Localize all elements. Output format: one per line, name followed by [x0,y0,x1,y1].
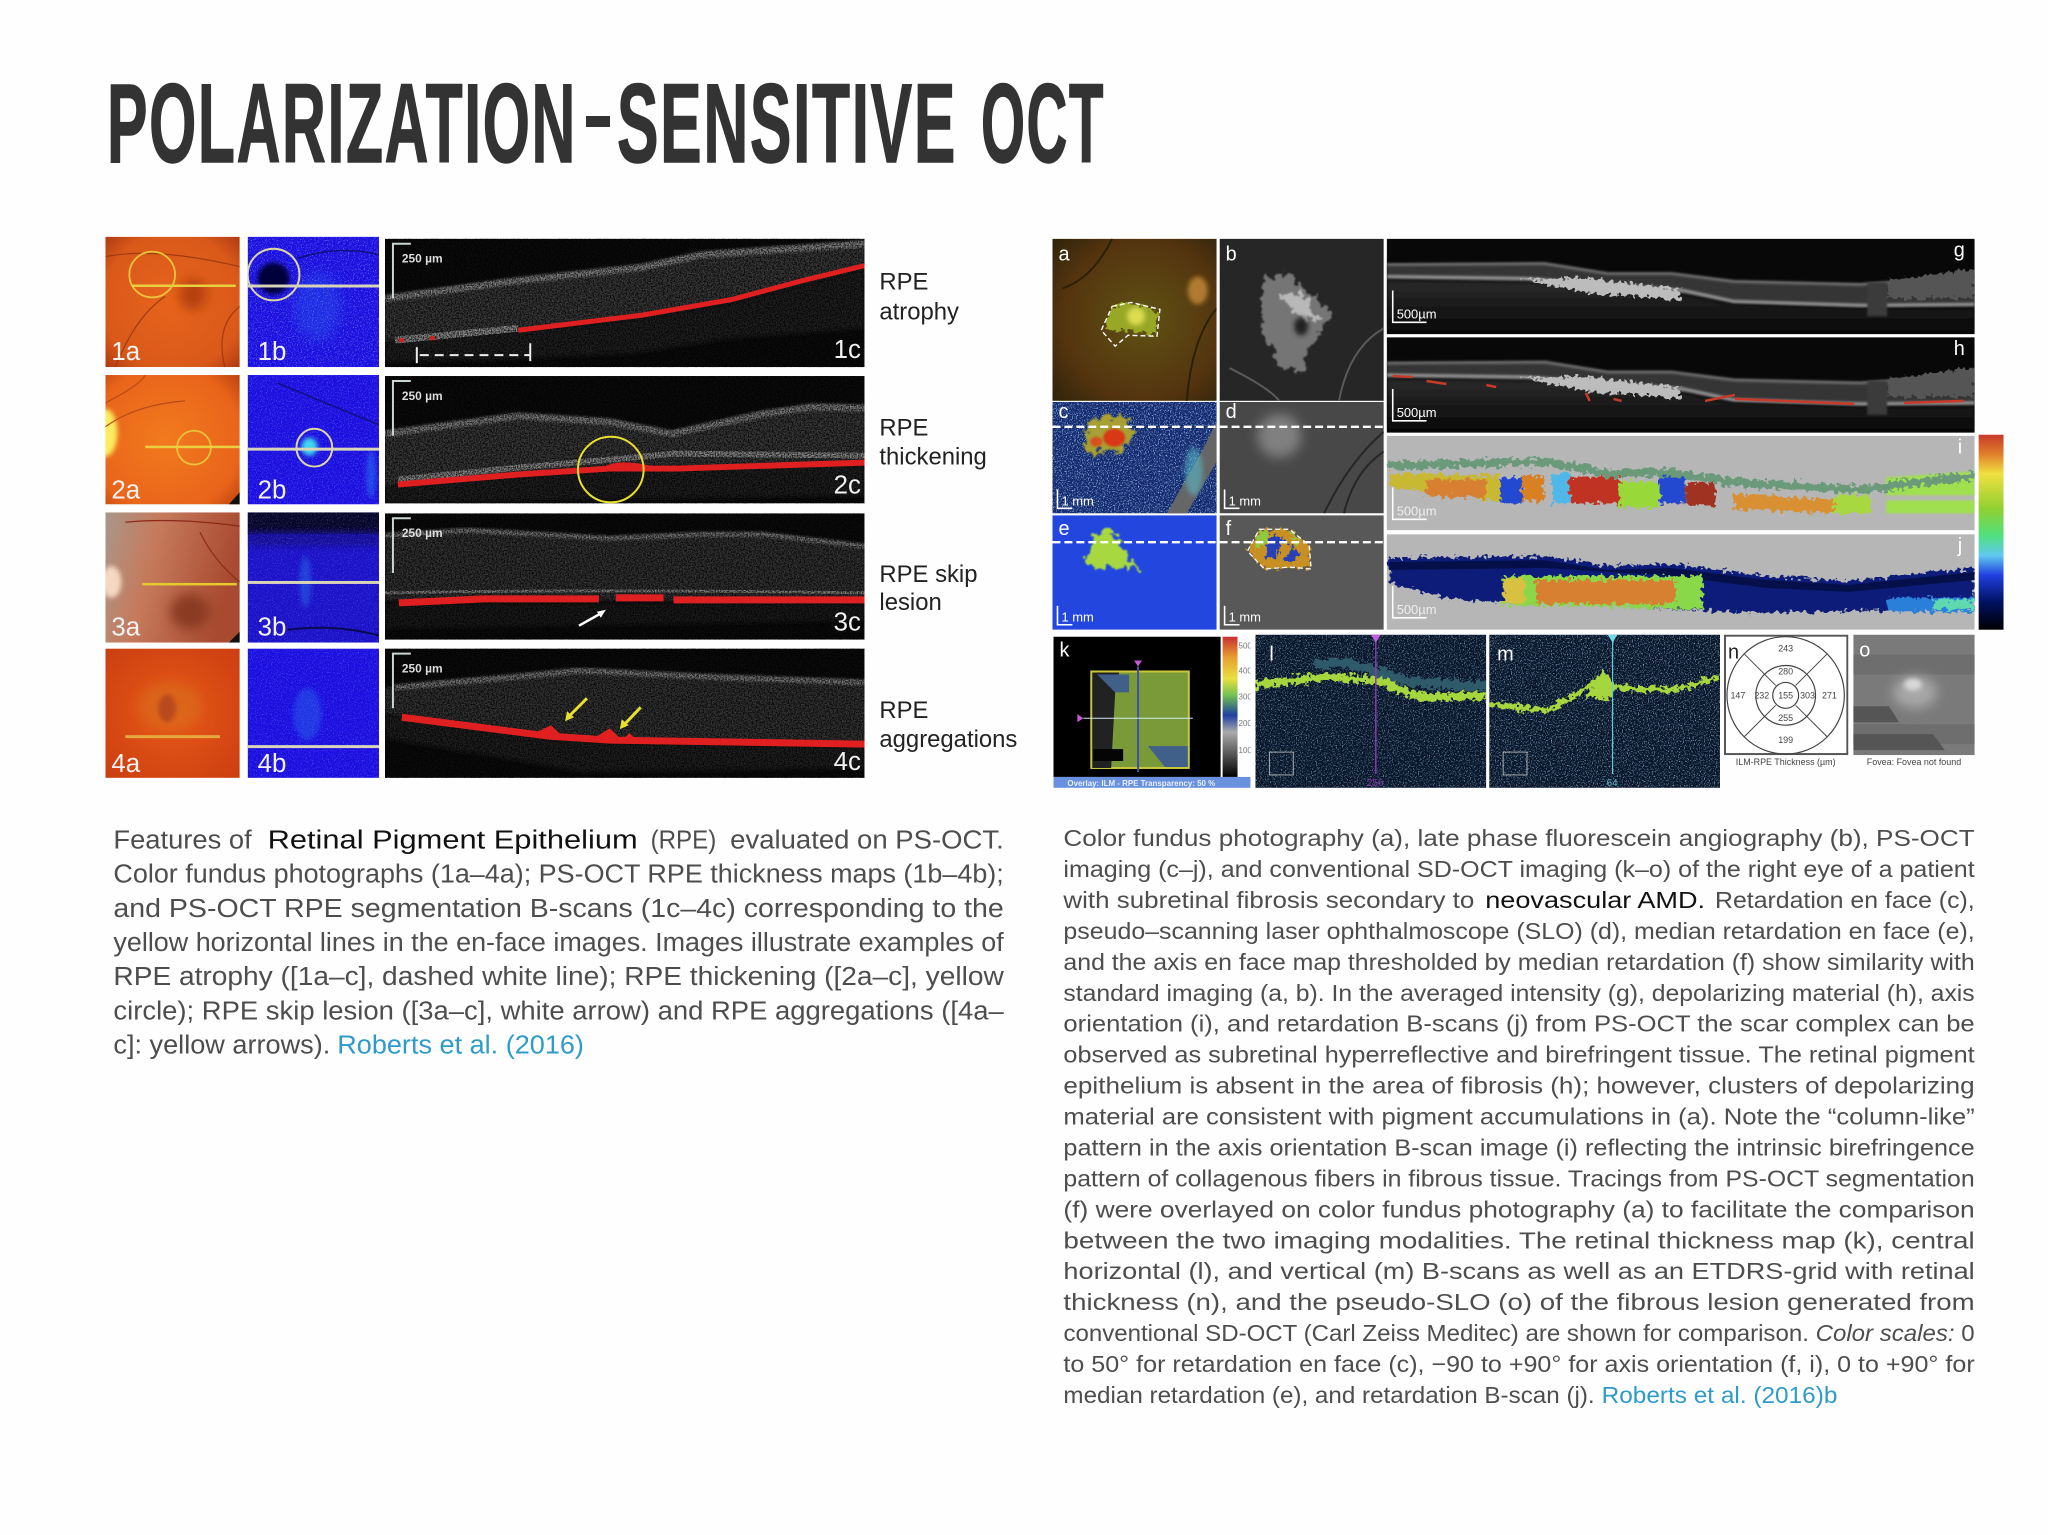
panel c: retardation en face [1052,401,1217,513]
panel j: retardation B-scan: 500µm [1397,602,1436,617]
panel n: ETDRS grid: ILM-RPE Thickness (µm) [1736,757,1836,767]
title: POLARIZATION [107,61,577,186]
panel e: median retardation: e [1058,518,1070,540]
panel k: retinal thickness map: 500 [1239,642,1252,651]
panel n: ETDRS grid: 243 [1778,644,1793,654]
label: RPE skip lesion: lesion [879,589,942,616]
left caption text block: yellow horizontal lines in the en-face images. Images illustrate examples of [113,929,1005,957]
right caption text block: pattern of collagenous fibers in fibrous tissue. Tracings from PS-OCT segmentation [1063,1165,1975,1191]
panel k: retinal thickness map: Overlay: ILM - RPE Transparency: 50 % [1067,779,1215,788]
label: RPE thickening: thickening [879,444,987,471]
panel n: ETDRS grid: 147 [1730,690,1745,700]
label: RPE skip lesion: RPE skip [879,561,978,588]
panel i: axis orientation B-scan: i [1958,437,1962,459]
panel i: axis orientation B-scan [1387,436,1975,530]
label: RPE aggregations: aggregations [879,726,1017,753]
panel g: averaged intensity B-scan: 500µm [1397,306,1436,321]
figure: RPE features on PS-OCT [94,237,1017,778]
panel k: retinal thickness map: 100 [1239,746,1252,755]
fundus photo 2a: 2a [111,476,141,504]
right caption text block: epithelium is absent in the area of fibrosis (h); however, clusters of depolarizing [1063,1073,1975,1099]
panel m: vertical B-scan: 64 [1607,778,1618,789]
thickness map 1b [248,237,379,367]
OCT B-scan 4c: 250 µm [402,661,443,675]
left caption text block: Retinal Pigment Epithelium [268,827,638,855]
panel o: pseudo-SLO thickness: Fovea: Fovea not found [1867,757,1961,767]
panel n: ETDRS grid: 271 [1822,690,1837,700]
OCT B-scan 2c: 250 µm [402,389,443,403]
label: RPE thickening: RPE [879,415,928,442]
panel a: color fundus [1052,239,1217,401]
left caption text block: and PS-OCT RPE segmentation B-scans (1c–4c) corresponding to the [113,895,1004,923]
fundus photo 1a: 1a [111,338,141,366]
OCT B-scan 1c [385,239,864,367]
panel h: depolarizing material B-scan: h [1954,338,1965,360]
OCT B-scan 2c: 2c [834,471,861,499]
panel c: retardation en face: 1 mm [1061,493,1094,508]
panel n: ETDRS grid: 232 [1754,690,1769,700]
panel b: fluorescein angiography: b [1226,244,1237,266]
thickness map 4b [248,649,379,778]
right caption text block: observed as subretinal hyperreflective and birefringent tissue. The retinal pigment [1063,1042,1975,1068]
panel k: retinal thickness map [1053,637,1252,788]
thickness map 4b: 4b [258,750,286,778]
thickness map 2b [248,375,379,504]
right caption text block: standard imaging (a, b). In the averaged intensity (g), depolarizing material (h), axis [1063,980,1975,1006]
panel f: axis en face: 1 mm [1229,610,1261,625]
right caption text block: neovascular AMD. [1485,887,1705,913]
panel k: retinal thickness map: 400 [1239,666,1252,675]
right caption text block: Roberts et al. (2016)b [1602,1382,1837,1408]
OCT B-scan 2c [385,376,864,503]
fundus photo 4a: 4a [111,750,141,778]
right caption text block: median retardation (e), and retardation B-scan (j). [1063,1382,1595,1408]
panel g: averaged intensity B-scan: g [1954,240,1965,262]
right caption text block: with subretinal fibrosis secondary to [1062,887,1474,913]
panel n: ETDRS grid: 303 [1800,690,1815,700]
fundus photo 1a [105,237,240,367]
OCT B-scan 4c [385,649,864,778]
panel k: retinal thickness map: k [1059,640,1069,662]
panel n: ETDRS grid: n [1728,642,1739,664]
fundus photo 3a: 3a [111,614,141,642]
label: RPE aggregations [879,697,1017,753]
panel c: retardation en face: c [1058,401,1068,423]
label: RPE atrophy: atrophy [879,298,959,325]
right caption text block [1062,825,1975,1408]
thickness map 2b: 2b [258,476,286,504]
thickness map 1b: 1b [258,338,286,366]
left caption text block: Features of [113,827,253,855]
panel k: retinal thickness map: 200 [1239,719,1252,728]
panel j: retardation B-scan: j [1957,535,1962,557]
right caption text block: Color fundus photography (a), late phase fluorescein angiography (b), PS-OCT [1063,825,1975,851]
panel i: axis orientation B-scan: 500µm [1397,503,1436,518]
left caption text block: Roberts et al. (2016) [337,1031,584,1059]
panel h: depolarizing material B-scan: 500µm [1397,405,1436,420]
OCT B-scan 1c: 1c [834,336,861,364]
panel l: horizontal B-scan: 256 [1367,778,1384,789]
left caption text block: RPE atrophy ([1a–c], dashed white line); RPE thickening ([2a–c], yellow [113,963,1004,991]
OCT B-scan 3c [385,513,864,640]
right caption text block: between the two imaging modalities. The retinal thickness map (k), central [1063,1227,1975,1253]
panel a: color fundus: a [1058,244,1070,266]
label: RPE atrophy: RPE [879,268,928,295]
panel l: horizontal B-scan [1255,635,1486,789]
OCT B-scan 1c: 250 µm [402,252,443,266]
OCT B-scan 3c: 3c [834,609,861,637]
left caption text block: circle); RPE skip lesion ([3a–c], white arrow) and RPE aggregations ([4a– [113,998,1004,1026]
label: RPE skip lesion [879,561,978,616]
OCT B-scan 3c: 250 µm [402,526,443,540]
panel e: median retardation: 1 mm [1061,610,1094,625]
panel j: retardation B-scan [1387,534,1975,630]
right caption text block: orientation (i), and retardation B-scans (j) from PS-OCT the scar complex can be [1063,1011,1975,1037]
title: OCT [981,61,1105,186]
panel n: ETDRS grid: 280 [1778,666,1793,676]
label: RPE atrophy [879,268,959,325]
panel n: ETDRS grid: 155 [1778,690,1793,700]
right caption text block: material are consistent with pigment accumulations in (a). Note the “column-like” [1063,1104,1975,1130]
left caption text block: Color fundus photographs (1a–4a); PS-OCT RPE thickness maps (1b–4b); [113,860,1004,888]
panel n: ETDRS grid [1725,636,1847,767]
right caption text block: and the axis en face map thresholded by median retardation (f) show similarity with [1063,949,1975,975]
right caption text block: pattern in the axis orientation B-scan image (i) reflecting the intrinsic birefringence [1063,1134,1975,1160]
left caption text block: evaluated on PS-OCT. [730,827,1004,855]
panel d: pseudo-SLO: d [1226,401,1237,423]
right caption text block: Retardation en face (c), [1715,887,1975,913]
page content [94,237,2004,1408]
OCT B-scan 4c: 4c [834,748,861,776]
panel o: pseudo-SLO thickness [1853,635,1975,767]
panel m: vertical B-scan [1489,635,1720,789]
fundus photo 3a [101,512,240,643]
right caption text block: to 50° for retardation en face (c), −90 to +90° for axis orientation (f, i), 0 to +90° for [1063,1351,1975,1377]
panel d: pseudo-SLO: 1 mm [1229,493,1261,508]
left caption text block: (RPE) [651,827,716,855]
right caption text block: (f) were overlayed on color fundus photography (a) to facilitate the comparison [1063,1196,1975,1222]
panel b: fluorescein angiography [1220,239,1384,401]
right caption text block: conventional SD-OCT (Carl Zeiss Meditec) are shown for comparison. Color scales: 0 [1063,1320,1975,1346]
left caption text block [113,827,1005,1059]
panel f: axis en face [1220,515,1384,630]
thickness map 3b [248,512,379,643]
right caption text block: horizontal (l), and vertical (m) B-scans as well as an ETDRS-grid with retinal [1063,1258,1975,1284]
panel n: ETDRS grid: 199 [1778,735,1793,745]
color scale bar [1979,435,2004,630]
figure: multimodal imaging of subretinal fibrosis [1052,239,2004,789]
panel m: vertical B-scan: m [1497,644,1514,666]
panel o: pseudo-SLO thickness: o [1859,640,1870,662]
title: SENSITIVE [617,61,957,186]
left caption text block: c]: yellow arrows). [113,1031,330,1059]
fundus photo 2a [94,375,240,504]
fundus photo 4a [105,649,240,778]
panel l: horizontal B-scan: l [1269,644,1274,666]
right caption text block: thickness (n), and the pseudo-SLO (o) of the fibrous lesion generated from [1063,1289,1975,1315]
panel f: axis en face: f [1226,518,1232,540]
panel k: retinal thickness map: 300 [1239,692,1252,701]
thickness map 3b: 3b [258,614,286,642]
panel e: median retardation [1052,515,1217,630]
panel n: ETDRS grid: 255 [1778,713,1793,723]
label: RPE thickening [879,415,987,471]
label: RPE aggregations: RPE [879,697,928,724]
right caption text block: pseudo–scanning laser ophthalmoscope (SLO) (d), median retardation en face (e), [1063,918,1975,944]
right caption text block: imaging (c–j), and conventional SD-OCT imaging (k–o) of the right eye of a patient [1063,856,1975,882]
panel d: pseudo-SLO [1220,401,1384,513]
panel g: averaged intensity B-scan [1387,239,1975,334]
panel h: depolarizing material B-scan [1387,337,1975,433]
